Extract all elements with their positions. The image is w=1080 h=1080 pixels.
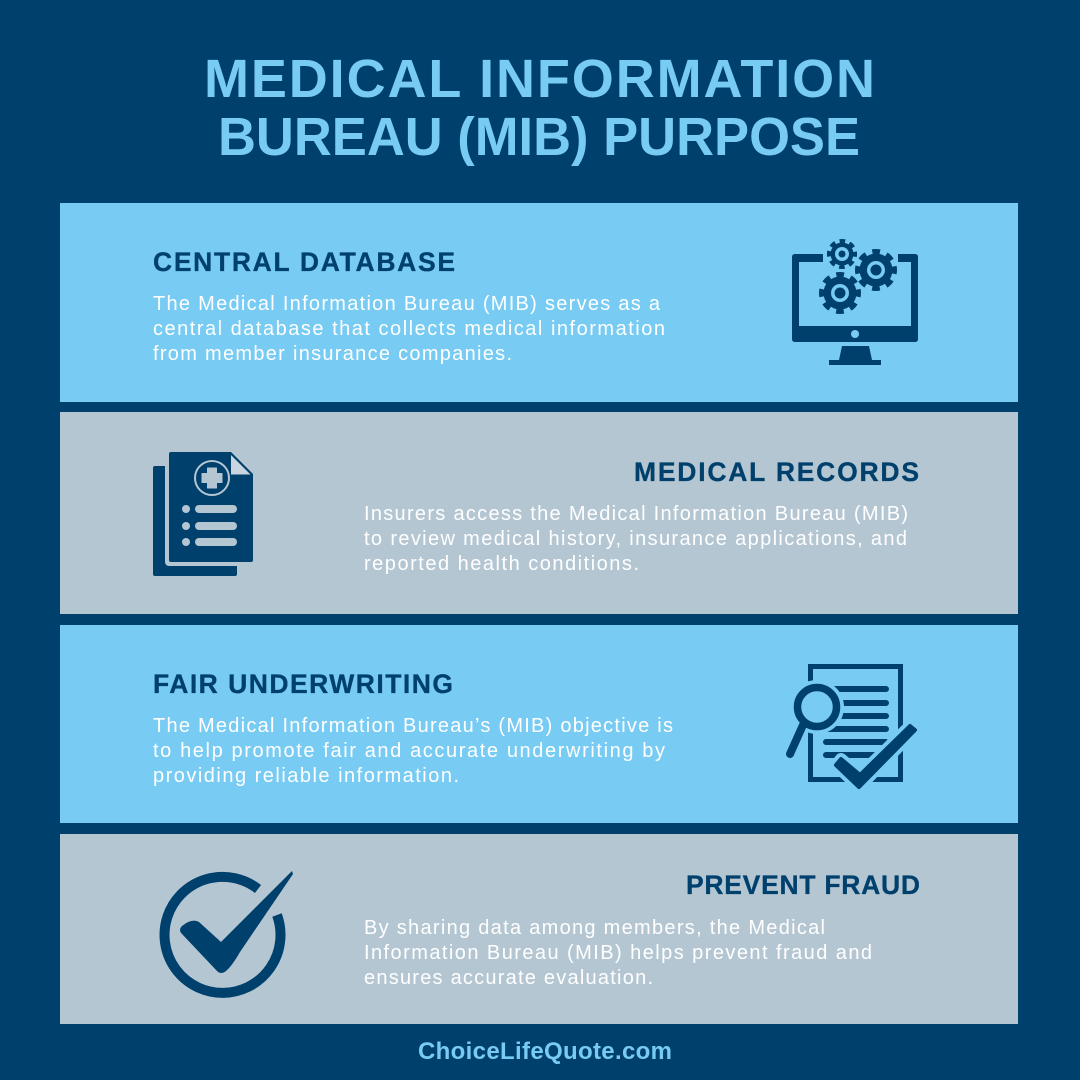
text: central database description: from member insurance companies. — [153, 343, 512, 365]
text: prevent fraud description: ensures accurate evaluation. — [364, 967, 653, 989]
panel: central database — [60, 203, 1018, 402]
text: prevent fraud description: Information Bureau (MIB) helps prevent fraud and — [364, 942, 872, 964]
text: fair underwriting description: The Medical Information Bureau’s (MIB) objective is — [153, 715, 673, 737]
icon: monitor with gears — [792, 241, 918, 365]
heading: prevent fraud: PREVENT FRAUD — [686, 870, 920, 900]
text: fair underwriting description: providing reliable information. — [153, 765, 459, 787]
icon: medical document — [153, 448, 257, 576]
heading: medical records: MEDICAL RECORDS — [634, 457, 919, 487]
heading: central database: CENTRAL DATABASE — [153, 247, 455, 277]
footer: website: ChoiceLifeQuote.com — [418, 1038, 672, 1065]
title: MEDICAL INFORMATION — [204, 49, 875, 109]
text: medical records description: to review medical history, insurance applications, and — [364, 528, 907, 550]
text: fair underwriting description: to help promote fair and accurate underwriting by — [153, 740, 665, 762]
text: fair underwriting description — [153, 715, 673, 787]
title: BUREAU (MIB) PURPOSE — [218, 107, 860, 167]
heading: fair underwriting: FAIR UNDERWRITING — [153, 669, 453, 699]
panel: fair underwriting — [60, 625, 1018, 823]
text: medical records description: reported health conditions. — [364, 553, 639, 575]
panel: prevent fraud — [60, 834, 1018, 1024]
icon: document with magnifier and check — [790, 666, 915, 787]
title — [204, 49, 875, 167]
text: prevent fraud description — [364, 917, 872, 989]
panel: medical records — [60, 412, 1018, 614]
text: central database description: The Medical Information Bureau (MIB) serves as a — [153, 293, 661, 315]
text: prevent fraud description: By sharing data among members, the Medical — [364, 917, 825, 939]
text: central database description — [153, 293, 665, 365]
text: central database description: central database that collects medical information — [153, 318, 665, 340]
text: medical records description: Insurers access the Medical Information Bureau (MIB) — [364, 503, 908, 525]
icon: circled check mark — [165, 871, 293, 993]
text: medical records description — [364, 503, 908, 575]
